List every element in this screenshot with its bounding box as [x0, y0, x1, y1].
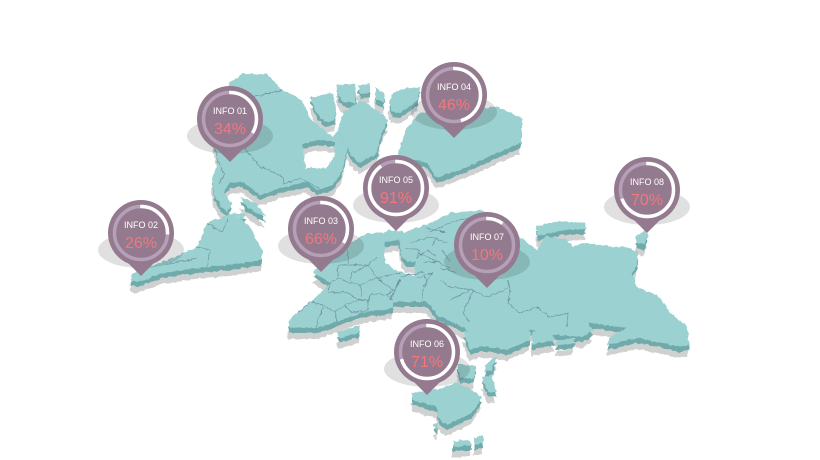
pin: INFO 08: 70%: [631, 192, 663, 209]
pin: INFO 04: INFO 04: [437, 82, 471, 92]
pin: INFO 04: 46%: [438, 97, 470, 114]
pin: INFO 06: [384, 319, 470, 395]
pin: INFO 08: INFO 08: [630, 177, 664, 187]
pin: INFO 05: INFO 05: [379, 175, 413, 185]
pin: INFO 06: 71%: [411, 354, 443, 371]
pin: INFO 02: [98, 200, 184, 276]
pin: INFO 03: INFO 03: [304, 216, 338, 226]
pin: INFO 05: 91%: [380, 190, 412, 207]
pin: INFO 03: [278, 196, 364, 272]
pin: INFO 05: [353, 155, 439, 231]
pin: INFO 07: [444, 212, 530, 288]
pin: INFO 07: 10%: [471, 247, 503, 264]
pin: INFO 03: 66%: [305, 231, 337, 248]
world map: [129, 74, 689, 458]
pin: INFO 01: INFO 01: [213, 106, 247, 116]
pin: INFO 01: [187, 86, 273, 162]
pin: INFO 07: INFO 07: [470, 232, 504, 242]
pin: INFO 04: [411, 62, 497, 138]
pin: INFO 02: 26%: [125, 235, 157, 252]
pin: INFO 02: INFO 02: [124, 220, 158, 230]
pin: INFO 08: [604, 157, 690, 233]
pin: INFO 01: 34%: [214, 121, 246, 138]
pin: INFO 06: INFO 06: [410, 339, 444, 349]
